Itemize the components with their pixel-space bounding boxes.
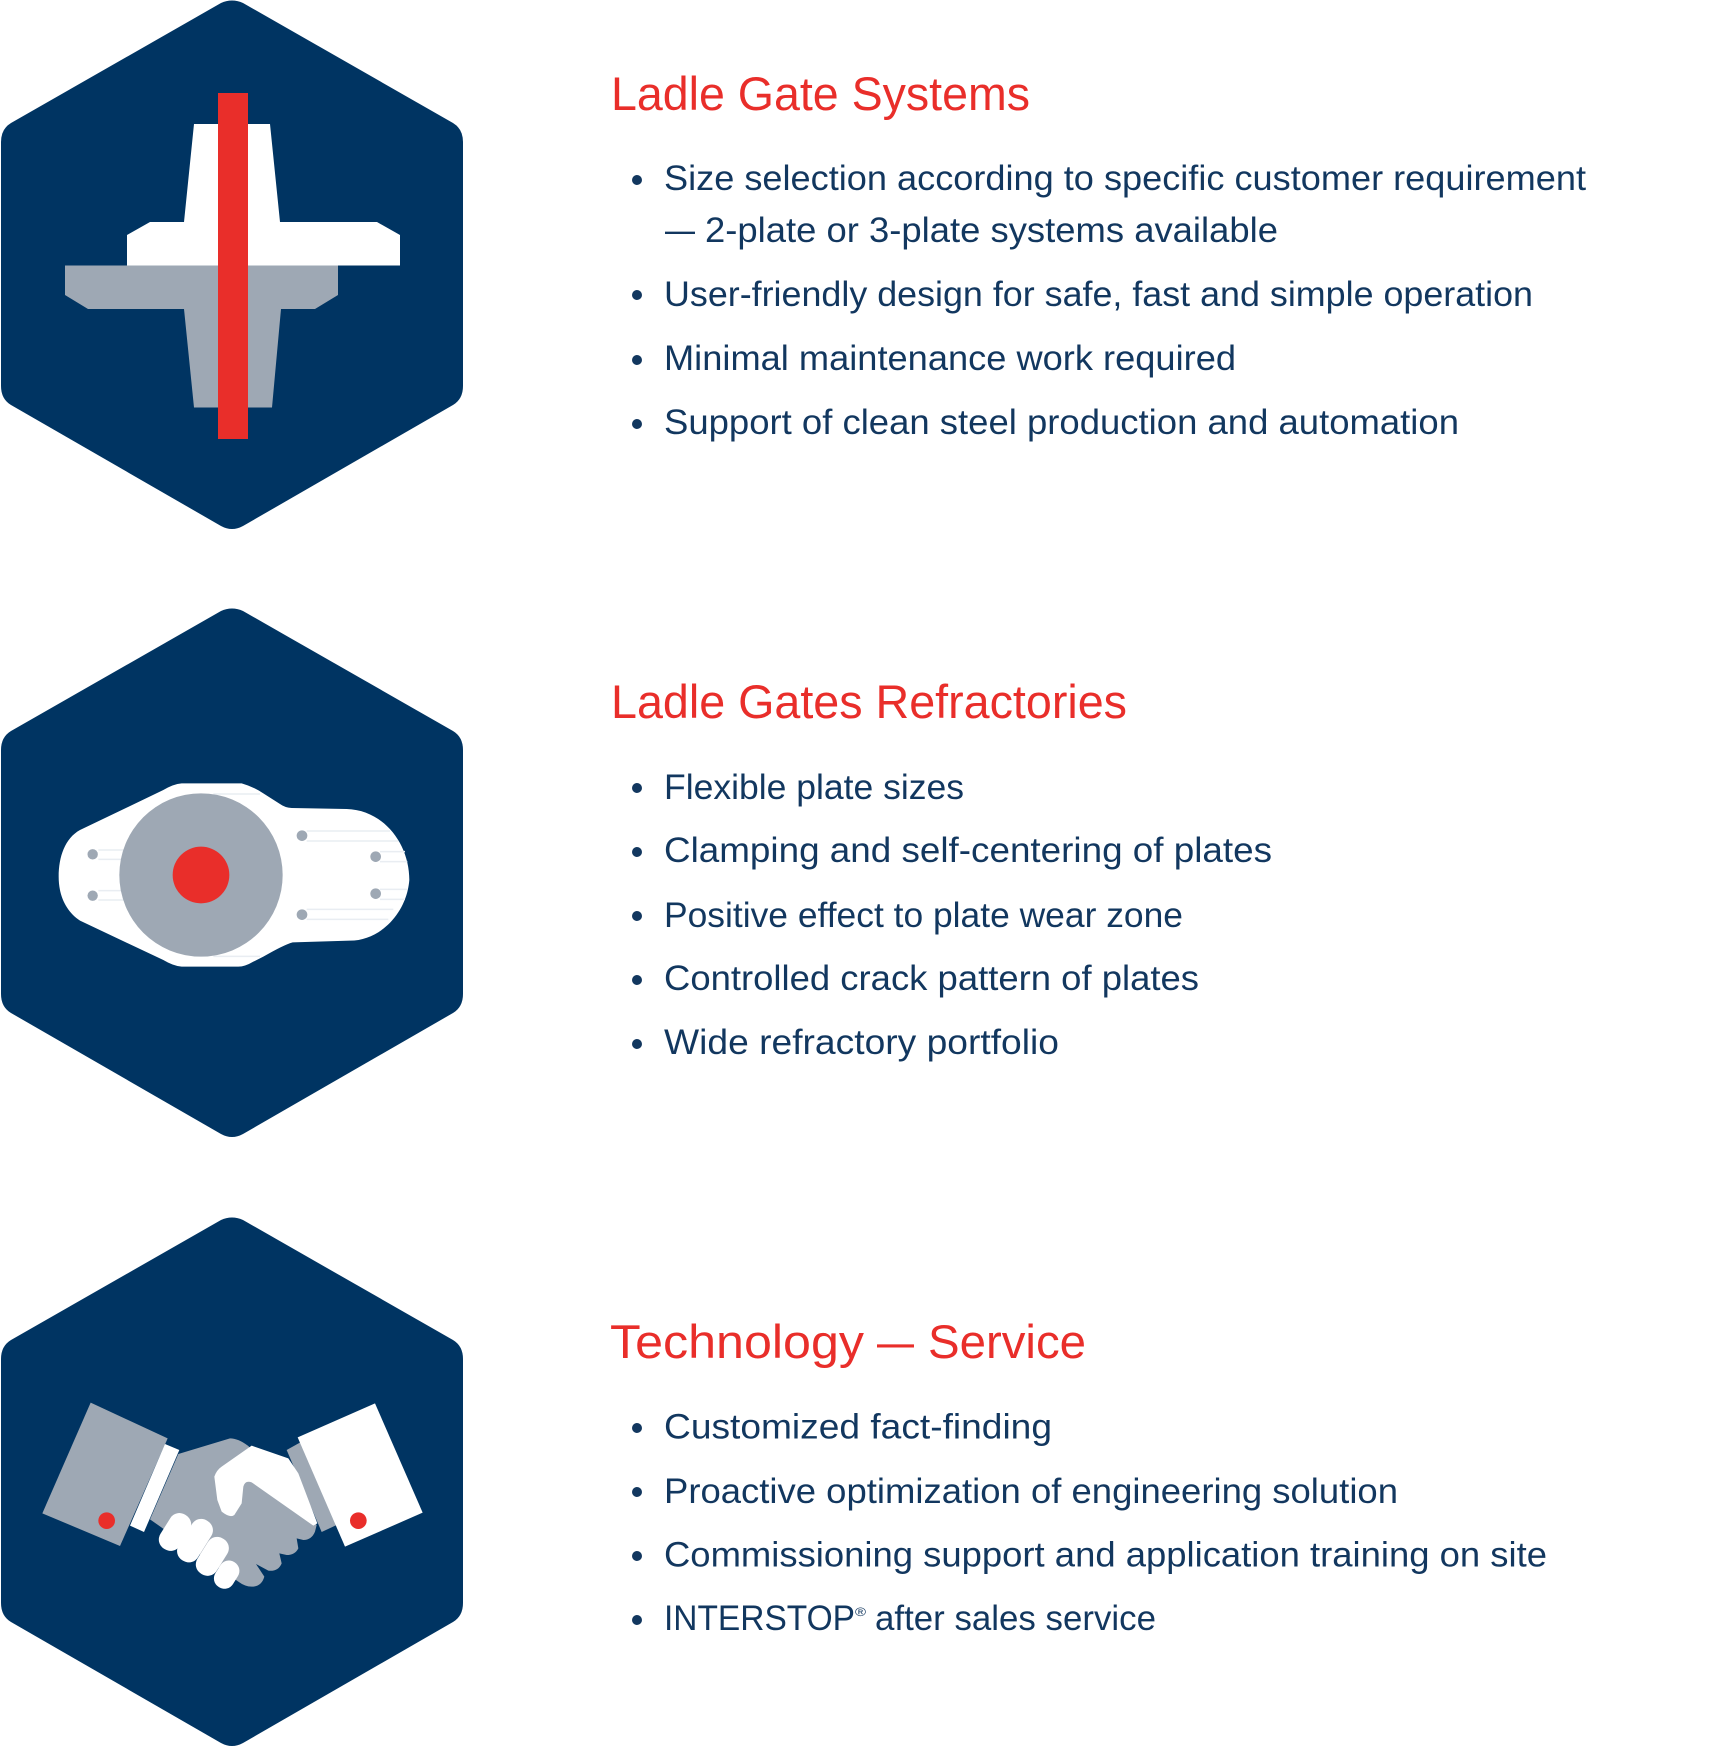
bullet list: ladle gate systems: Size selection according to specific customer requirement: [664, 159, 1586, 198]
bullet list: technology service: ®: [855, 1605, 866, 1619]
panel: ladle gates refractories: [1, 608, 1272, 1137]
bullet list: ladle gate systems: —: [665, 211, 695, 250]
bullet list: technology service: Proactive optimization of engineering solution: [664, 1472, 1398, 1511]
heading: ladle gates refractories: Ladle Gates Refractories: [611, 675, 1127, 728]
icon: handshake hexagon: [1, 1218, 463, 1746]
bullet list: ladle gate systems: [632, 159, 1586, 442]
bullet list: ladle gate systems: User-friendly design for safe, fast and simple operation: [664, 275, 1533, 314]
bullet list: technology service: Commissioning support and application training on site: [664, 1536, 1547, 1574]
bullet list: ladle gates refractories: Wide refractory portfolio: [664, 1023, 1059, 1062]
heading: technology service: [610, 1315, 1086, 1368]
bullet list: technology service: INTERSTOP: [664, 1599, 855, 1638]
panel: technology service: [1, 1218, 1547, 1746]
bullet list: ladle gate systems: 2-plate or 3-plate systems available: [705, 211, 1278, 250]
bullet list: ladle gates refractories: Controlled crack pattern of plates: [664, 959, 1199, 998]
bullet list: technology service: after sales service: [875, 1599, 1156, 1638]
bullet list: ladle gates refractories: Flexible plate sizes: [664, 768, 964, 807]
heading: ladle gate systems: Ladle Gate Systems: [611, 67, 1030, 120]
bullet list: ladle gate systems: Support of clean steel production and automation: [664, 403, 1459, 442]
bullet list: ladle gate systems: Minimal maintenance work required: [664, 339, 1236, 378]
bullet list: ladle gates refractories: [632, 768, 1272, 1062]
bullet list: technology service: Customized fact-finding: [664, 1408, 1052, 1446]
bullet list: ladle gates refractories: Clamping and self-centering of plates: [664, 831, 1272, 870]
heading: technology service: Service: [928, 1315, 1086, 1368]
panel: ladle gate systems: [1, 0, 1586, 529]
heading: technology service: Technology: [610, 1315, 865, 1368]
bullet list: ladle gates refractories: Positive effect to plate wear zone: [664, 896, 1183, 935]
icon: refractory plate hexagon: [1, 608, 463, 1137]
heading: technology service: —: [877, 1315, 914, 1368]
bullet list: technology service: [632, 1408, 1547, 1638]
icon: ladle gate cross-section hexagon: [1, 0, 463, 529]
